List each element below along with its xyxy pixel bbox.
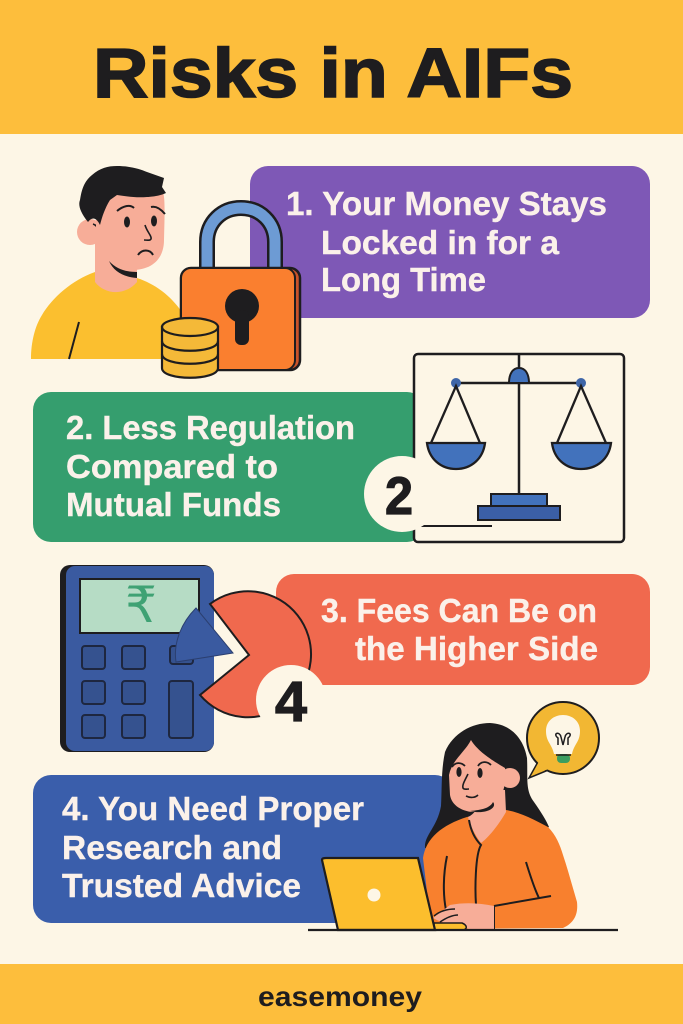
badge: number 4: 4 [275, 670, 307, 734]
risk 3 text [321, 592, 598, 667]
risk 2 text: 2. Less Regulation [66, 409, 355, 446]
risk 1 text: 1. Your Money Stays [286, 185, 607, 222]
risk 4 text: Trusted Advice [62, 867, 301, 904]
risk 4 text: 4. You Need Proper [62, 790, 364, 827]
icon: rupee symbol: ₹ [125, 576, 157, 634]
panel: risk 2 regulation [33, 392, 425, 542]
footer band [0, 964, 683, 1024]
icon: laptop [308, 858, 618, 930]
icon: coin stack [162, 318, 218, 378]
icon: worried man [31, 166, 182, 359]
risk 1 text: Locked in for a [321, 224, 560, 261]
panel: risk 3 fees [276, 574, 650, 685]
icon: lightbulb speech bubble [527, 702, 599, 778]
badge: number 2: 2 [385, 467, 413, 526]
icon: padlock [181, 208, 300, 370]
risk 2 text: Compared to [66, 448, 278, 485]
risk 1 text: Long Time [321, 261, 486, 298]
icon: balance scale card [414, 354, 624, 542]
risk 4 text: Research and [62, 829, 282, 866]
risk 2 text [66, 409, 355, 523]
risk 2 text: Mutual Funds [66, 486, 281, 523]
risk 1 text [286, 185, 607, 298]
panel: risk 4 research [33, 775, 453, 923]
chart: pie with wedge removed [175, 591, 311, 717]
header band [0, 0, 683, 134]
panel: risk 1 locked in [250, 166, 650, 318]
risk 3 text: 3. Fees Can Be on [321, 592, 597, 629]
icon: calculator [60, 565, 214, 752]
brand wordmark: easemoney [258, 981, 422, 1012]
badge: number 4 [256, 665, 326, 735]
badge: number 2 [364, 456, 440, 532]
title: Risks in AIFs [93, 34, 573, 112]
risk 3 text: the Higher Side [355, 630, 598, 667]
risk 4 text [62, 790, 364, 904]
icon: woman at laptop [423, 723, 577, 930]
pie wedge [175, 608, 233, 662]
